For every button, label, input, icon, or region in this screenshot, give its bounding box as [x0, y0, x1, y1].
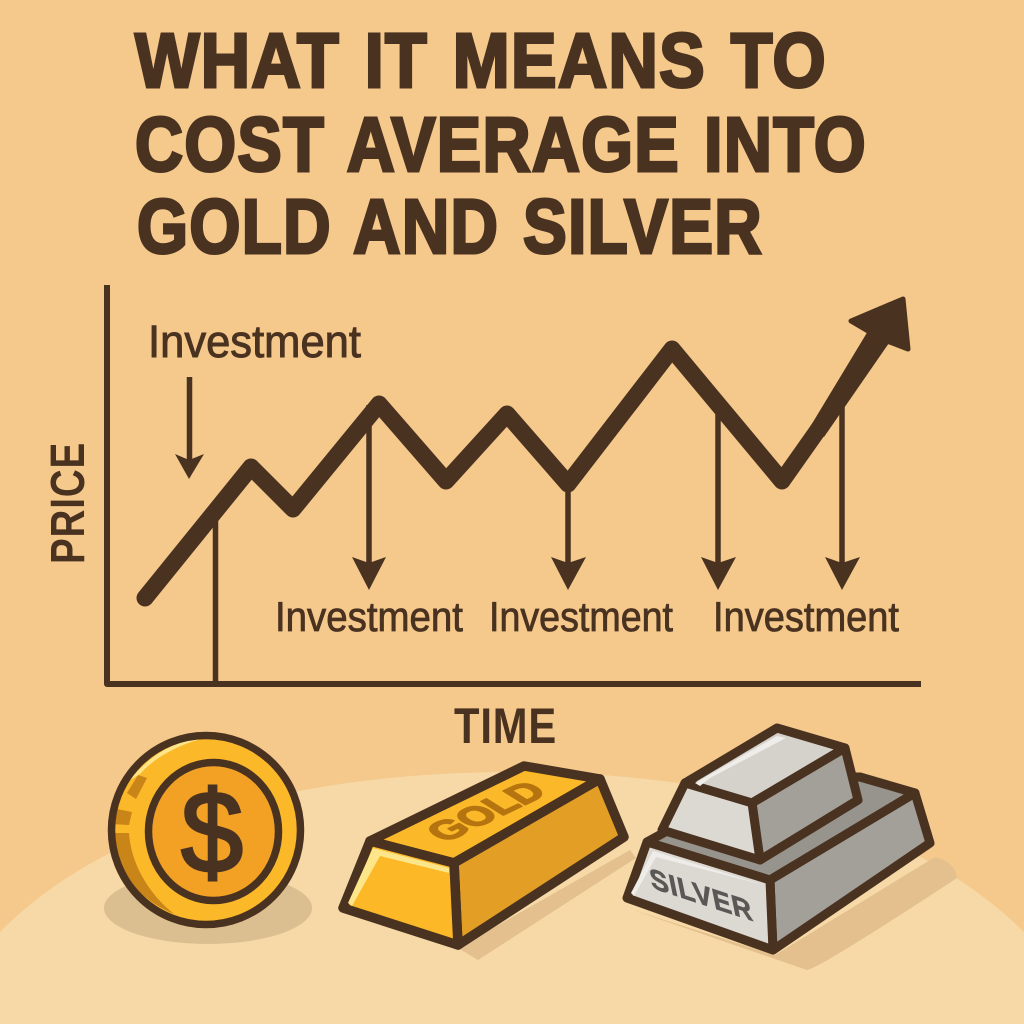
- investment labels: Investment: [275, 593, 463, 640]
- icon: gold coin: [104, 735, 312, 944]
- axes: [107, 285, 921, 684]
- investment labels: Investment: [713, 593, 899, 640]
- line chart: [42, 285, 921, 754]
- first investment label and arrow: Investment: [148, 316, 361, 367]
- icon: gold bar: [343, 766, 636, 960]
- y axis label: PRICE: [42, 442, 95, 564]
- ground hill: [0, 772, 1024, 1024]
- icon: silver bars: [627, 728, 957, 970]
- investment labels: Investment: [489, 593, 673, 640]
- price arrow shaft: [810, 331, 889, 437]
- x axis label: TIME: [454, 698, 557, 754]
- first investment label and arrow: [148, 316, 361, 479]
- title: COST AVERAGE INTO: [135, 102, 867, 188]
- title: GOLD AND SILVER: [137, 184, 763, 270]
- price arrow head: [851, 299, 908, 349]
- arrowheads: [352, 557, 860, 590]
- icon: silver bars: SILVER: [647, 863, 756, 928]
- icon: gold bar: GOLD: [417, 776, 556, 848]
- title: [135, 18, 867, 270]
- investment labels: [275, 593, 899, 640]
- title: WHAT IT MEANS TO: [135, 18, 827, 104]
- drop lines: [216, 395, 842, 684]
- line start cap: [136, 590, 154, 606]
- price line: [145, 349, 825, 598]
- icon: gold coin: $: [181, 767, 243, 897]
